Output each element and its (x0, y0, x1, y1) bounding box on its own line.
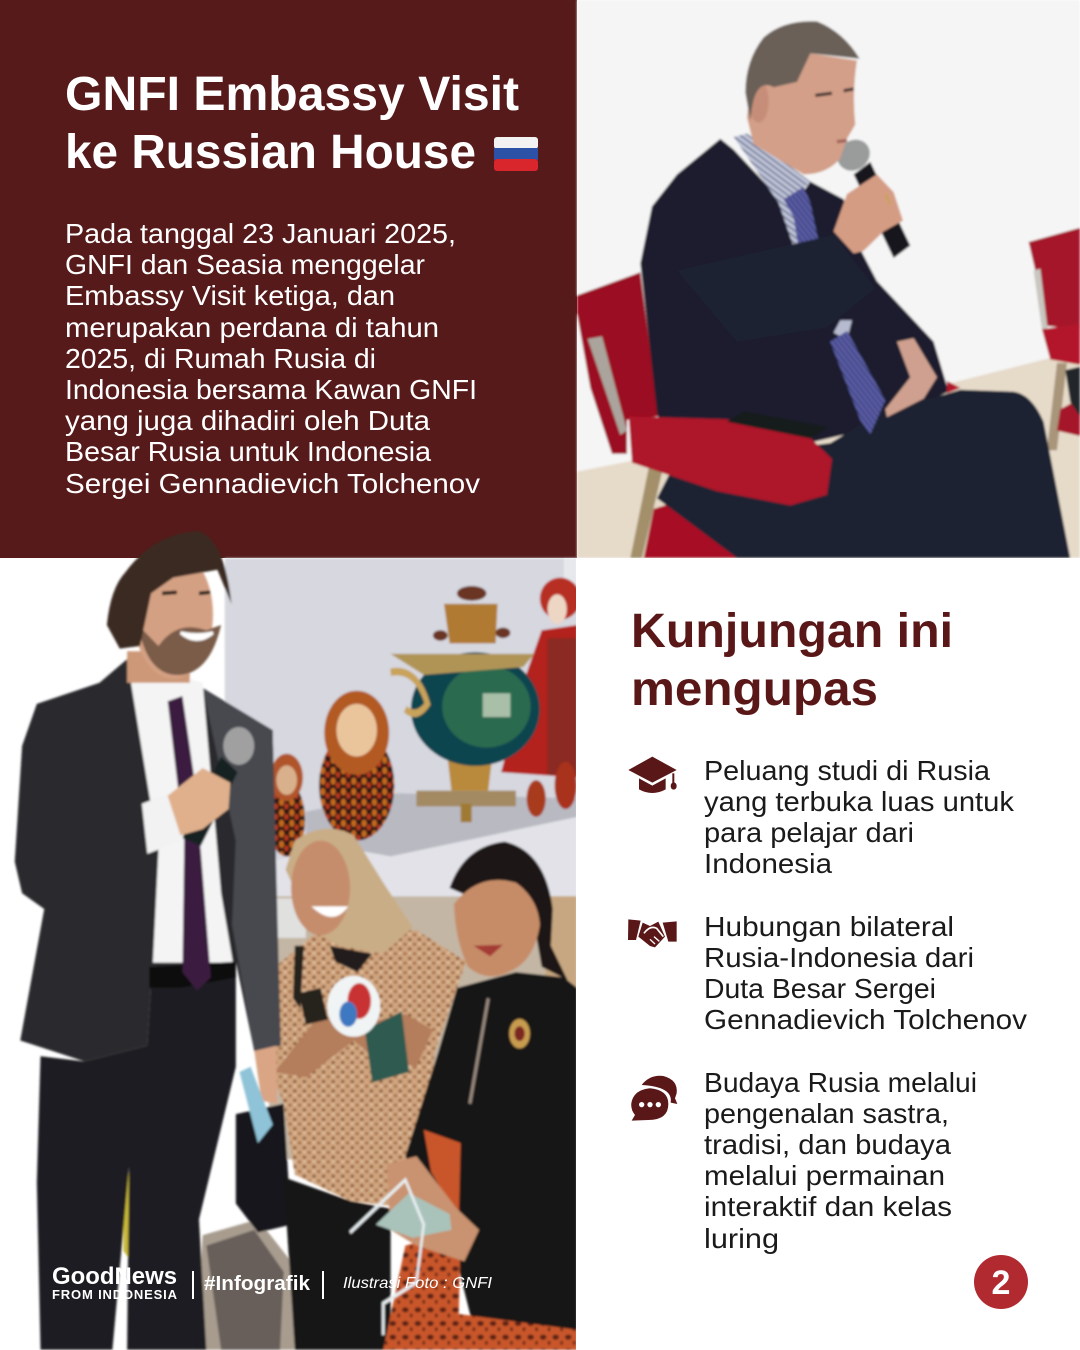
text block: intro paragraph: yang juga dihadiri oleh Duta (65, 405, 430, 436)
text block: intro paragraph: Besar Rusia untuk Indonesia (65, 436, 431, 467)
logo: GoodNews from Indonesia: GoodNews (52, 1263, 177, 1290)
footer: logo and credit (52, 1263, 493, 1302)
page number badge (974, 1255, 1028, 1309)
text block: bilateral relations: Hubungan bilateral (704, 911, 954, 942)
text block: intro paragraph (65, 218, 480, 499)
text block: Russian culture: interaktif dan kelas (704, 1191, 952, 1222)
text block: bilateral relations (704, 911, 1027, 1035)
icon: handshake (628, 919, 677, 947)
icon: Russian flag (494, 137, 538, 171)
text block: study opportunities: Peluang studi di Rusia (704, 755, 990, 786)
panel: maroon intro (0, 0, 577, 558)
text block: intro paragraph: 2025, di Rumah Rusia di (65, 343, 376, 374)
icon: chat bubbles (631, 1076, 677, 1121)
logo: GoodNews from Indonesia: FROM INDONESIA (52, 1287, 178, 1302)
text block: intro paragraph: Sergei Gennadievich Tolchenov (65, 468, 480, 499)
text block: intro paragraph: Pada tanggal 23 Januari 2025, (65, 218, 456, 249)
title: ke Russian House (65, 126, 476, 179)
text block: intro paragraph: Embassy Visit ketiga, dan (65, 280, 395, 311)
page number badge: 2 (992, 1264, 1010, 1302)
heading: Kunjungan ini mengupas: mengupas (631, 663, 878, 716)
logo: GoodNews from Indonesia (52, 1263, 178, 1302)
text block: Russian culture: luring (704, 1223, 779, 1254)
hashtag: #Infografik (204, 1273, 311, 1295)
text block: Russian culture: Budaya Rusia melalui (704, 1067, 977, 1098)
text block: study opportunities: yang terbuka luas untuk (704, 786, 1015, 817)
text block: Russian culture (704, 1067, 977, 1254)
white panel: right column background (576, 558, 1080, 1350)
photo: ambassador speaking (577, 0, 1080, 558)
text block: study opportunities: Indonesia (704, 848, 832, 879)
text block: intro paragraph: merupakan perdana di tahun (65, 312, 439, 343)
photo credit: Ilustrasi Foto : GNFI (343, 1275, 493, 1292)
title: GNFI Embassy Visit (65, 68, 519, 121)
text block: Russian culture: tradisi, dan budaya (704, 1129, 951, 1160)
text block: Russian culture: melalui permainan (704, 1160, 945, 1191)
heading: Kunjungan ini mengupas: Kunjungan ini (631, 605, 953, 658)
icon: graduation cap (628, 757, 677, 793)
text block: intro paragraph: Indonesia bersama Kawan GNFI (65, 374, 477, 405)
text block: bilateral relations: Rusia-Indonesia dari (704, 942, 974, 973)
text block: Russian culture: pengenalan sastra, (704, 1098, 949, 1129)
text block: study opportunities: para pelajar dari (704, 817, 914, 848)
text block: study opportunities (704, 755, 1015, 879)
text block: intro paragraph: GNFI dan Seasia menggelar (65, 249, 425, 280)
heading: Kunjungan ini mengupas (631, 605, 953, 716)
title (65, 68, 519, 179)
text block: bilateral relations: Gennadievich Tolchenov (704, 1004, 1027, 1035)
text block: bilateral relations: Duta Besar Sergei (704, 973, 936, 1004)
photo collage: speaker, souvenirs and two participants (15, 531, 580, 1350)
